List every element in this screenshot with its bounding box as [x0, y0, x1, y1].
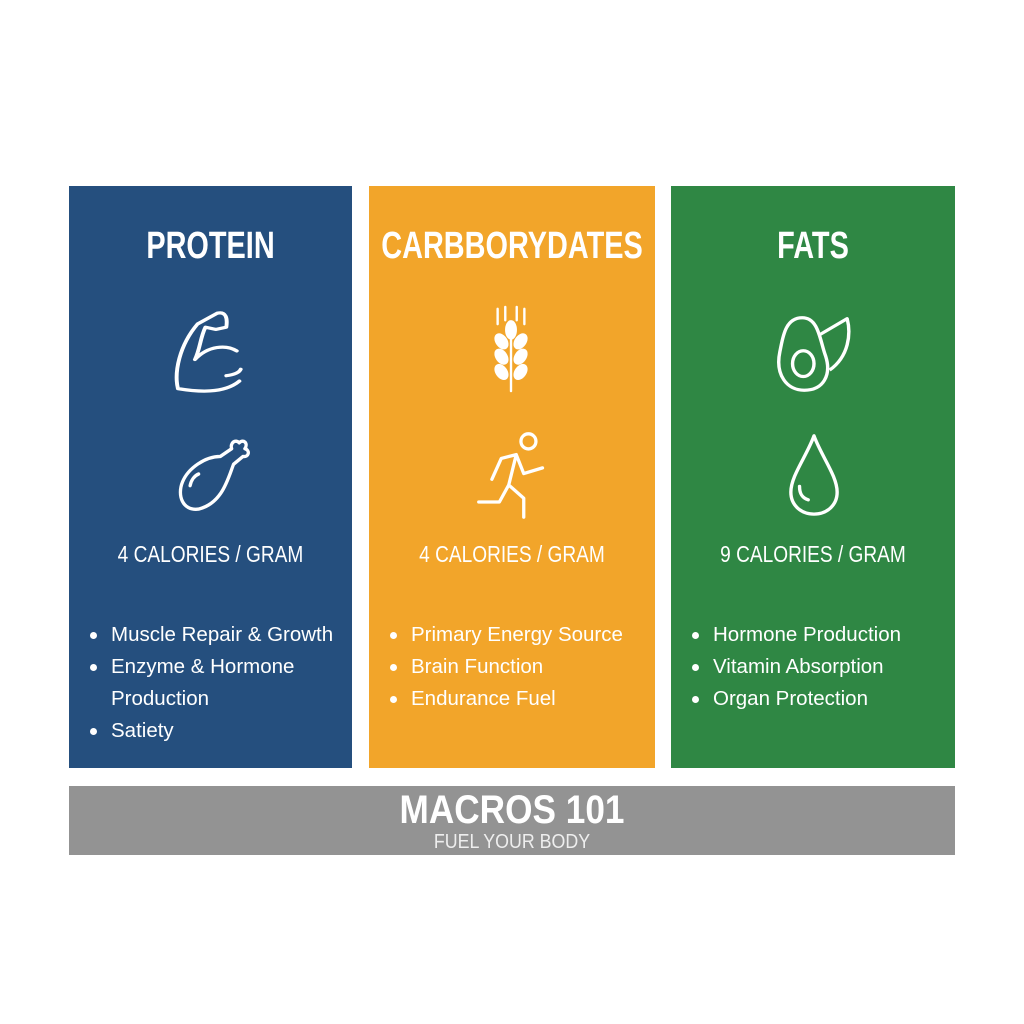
list: carb benefits — [390, 623, 623, 710]
list: protein benefits: Satiety — [111, 719, 174, 742]
calories: protein: 4 CALORIES / GRAM — [118, 541, 303, 567]
list: protein benefits: Production — [111, 687, 209, 710]
icon: runner — [477, 432, 544, 519]
list: carb benefits: Brain Function — [411, 655, 543, 678]
icon: oil drop — [789, 434, 839, 516]
panel: protein — [69, 186, 352, 768]
calories: carbs: 4 CALORIES / GRAM — [419, 541, 605, 567]
footer banner — [69, 786, 955, 855]
heading: carbohydrates: CARBBORYDATES — [381, 225, 643, 267]
heading: protein: PROTEIN — [146, 225, 275, 267]
icon: flexed arm — [174, 311, 243, 393]
panel: fats — [671, 186, 955, 768]
calories: fats: 9 CALORIES / GRAM — [720, 541, 906, 567]
list: protein benefits: Muscle Repair & Growth — [111, 623, 333, 646]
list: fat benefits: Vitamin Absorption — [713, 655, 884, 678]
footer subtitle: FUEL YOUR BODY — [434, 831, 590, 853]
heading: fats: FATS — [777, 225, 849, 267]
list: fat benefits: Organ Protection — [713, 687, 868, 710]
icon: chicken leg — [178, 440, 250, 511]
list: protein benefits — [90, 623, 333, 742]
icon: wheat — [494, 306, 528, 392]
list: carb benefits: Endurance Fuel — [411, 687, 556, 710]
list: carb benefits: Primary Energy Source — [411, 623, 623, 646]
icon: avocado — [777, 316, 851, 392]
list: fat benefits: Hormone Production — [713, 623, 901, 646]
panel: carbohydrates — [369, 186, 655, 768]
list: protein benefits: Enzyme & Hormone — [111, 655, 294, 678]
list: fat benefits — [692, 623, 901, 710]
footer title: MACROS 101 — [400, 788, 624, 832]
